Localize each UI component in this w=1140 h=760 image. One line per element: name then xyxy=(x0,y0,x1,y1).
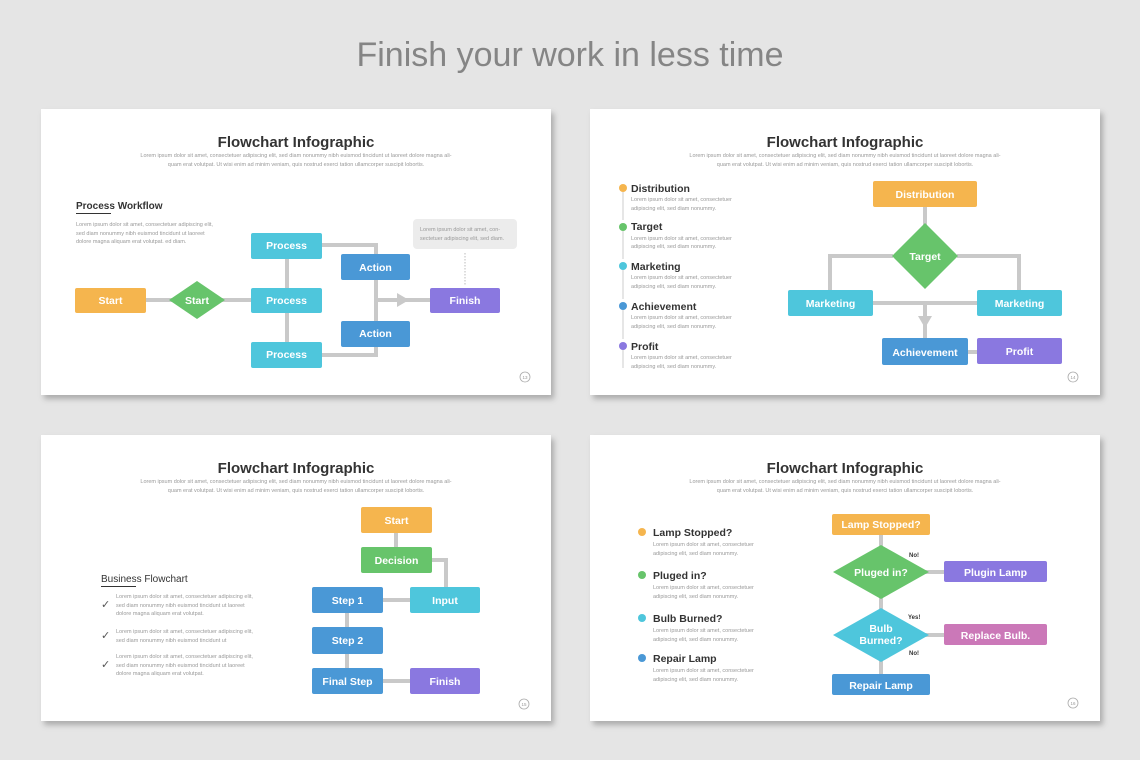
panel: lamp flowchart: 16 xyxy=(1070,701,1076,706)
list: Repair Lamp xyxy=(653,653,717,665)
text block: business flowchart: Business Flowchart xyxy=(101,574,188,585)
list: Profit xyxy=(631,341,659,353)
list: Lamp Stopped? xyxy=(653,527,732,539)
text block: business flowchart: Lorem ipsum dolor sit amet, consectetuer adipiscing elit, xyxy=(116,629,253,635)
list: Lorem ipsum dolor sit amet, consectetuer xyxy=(631,315,732,321)
list: Pluged in? xyxy=(653,570,707,582)
panel: lamp flowchart: No! xyxy=(909,651,919,657)
text block: business flowchart: ✓ xyxy=(101,659,110,671)
text block: subtitle: quam erat volutpat. Ut wisi enim ad minim veniam, quis nostrud exerci tation ullamcorper suscipit lobortis. xyxy=(168,488,425,494)
panel: lamp flowchart: Bulb xyxy=(869,623,893,635)
list: Distribution xyxy=(631,183,690,195)
panel: distribution flow: Marketing xyxy=(806,298,855,310)
text block: subtitle xyxy=(140,153,452,168)
list: adipiscing elit, sed diam nonummy. xyxy=(631,244,717,250)
callout xyxy=(413,219,517,249)
text block: subtitle: Lorem ipsum dolor sit amet, consectetuer adipiscing elit, sed diam nonummy nibh euismod tincidunt ut laoreet dolore magna ali- xyxy=(689,479,1001,485)
text block: process workflow: sed diam nonummy nibh euismod tincidunt ut laoreet xyxy=(76,231,205,237)
panel: distribution flow: Achievement xyxy=(892,347,958,359)
text block: subtitle xyxy=(689,479,1001,494)
panel: business flowchart: Start xyxy=(385,515,409,527)
panel: business flowchart xyxy=(41,435,551,721)
panel: distribution flow: Distribution xyxy=(896,189,954,201)
list: adipiscing elit, sed diam nonummy. xyxy=(653,594,739,600)
list: adipiscing elit, sed diam nonummy. xyxy=(653,677,739,683)
heading: Flowchart Infographic xyxy=(218,134,374,151)
panel: process workflow xyxy=(41,109,551,395)
list: Marketing xyxy=(631,261,681,273)
list xyxy=(619,183,732,370)
panel: process workflow: Process xyxy=(266,349,307,361)
panel: process workflow: Process xyxy=(266,295,307,307)
list: Lorem ipsum dolor sit amet, consectetuer xyxy=(631,197,732,203)
panel: lamp flowchart: Pluged in? xyxy=(854,567,908,579)
heading: Flowchart Infographic xyxy=(767,134,923,151)
panel: process workflow: Start xyxy=(99,295,123,307)
text block: business flowchart: dolore magna aliquam erat volutpat. xyxy=(116,671,204,677)
text block: subtitle: quam erat volutpat. Ut wisi enim ad minim veniam, quis nostrud exerci tation ullamcorper suscipit lobortis. xyxy=(717,162,974,168)
panel: business flowchart: 15 xyxy=(521,702,527,707)
text block: business flowchart: ✓ xyxy=(101,599,110,611)
list: Lorem ipsum dolor sit amet, consectetuer xyxy=(653,542,754,548)
text block: subtitle xyxy=(689,153,1001,168)
panel: distribution flow: Marketing xyxy=(995,298,1044,310)
callout: sectetuer adipiscing elit, sed diam. xyxy=(420,236,505,242)
list: Achievement xyxy=(631,301,697,313)
panel: process workflow: 13 xyxy=(522,375,528,380)
panel: process workflow: Finish xyxy=(450,295,480,307)
panel: lamp flowchart: No! xyxy=(909,553,919,559)
panel: lamp flowchart: Plugin Lamp xyxy=(964,567,1027,579)
panel: distribution flow: Profit xyxy=(1006,346,1034,358)
panel: process workflow: Action xyxy=(359,328,392,340)
text block: subtitle xyxy=(140,479,452,494)
panel: distribution flow: 14 xyxy=(1070,375,1076,380)
text block: subtitle: quam erat volutpat. Ut wisi enim ad minim veniam, quis nostrud exerci tation ullamcorper suscipit lobortis. xyxy=(717,488,974,494)
panel: lamp flowchart xyxy=(590,435,1100,721)
text block: business flowchart: Lorem ipsum dolor sit amet, consectetuer adipiscing elit, xyxy=(116,654,253,660)
text block: process workflow: dolore magna aliquam erat volutpat. ed diam. xyxy=(76,239,187,245)
panel: distribution flow xyxy=(590,109,1100,395)
list: Target xyxy=(631,221,663,233)
panel: business flowchart: Final Step xyxy=(322,676,373,688)
panel: lamp flowchart: Replace Bulb. xyxy=(961,630,1030,642)
list: adipiscing elit, sed diam nonummy. xyxy=(653,637,739,643)
text block: business flowchart: sed diam nonummy nibh euismod tincidunt ut xyxy=(116,638,227,644)
text block: subtitle: Lorem ipsum dolor sit amet, consectetuer adipiscing elit, sed diam nonummy nibh euismod tincidunt ut laoreet dolore magna ali- xyxy=(140,479,452,485)
panel: process workflow: Action xyxy=(359,262,392,274)
panel: business flowchart: Finish xyxy=(430,676,460,688)
panel: lamp flowchart: Lamp Stopped? xyxy=(841,519,921,531)
text block: subtitle: quam erat volutpat. Ut wisi enim ad minim veniam, quis nostrud exerci tation ullamcorper suscipit lobortis. xyxy=(168,162,425,168)
text block: business flowchart: ✓ xyxy=(101,630,110,642)
list: Lorem ipsum dolor sit amet, consectetuer xyxy=(631,355,732,361)
text block: business flowchart xyxy=(101,574,253,677)
text block: business flowchart: sed diam nonummy nibh euismod tincidunt ut laoreet xyxy=(116,603,245,609)
panel: business flowchart: Step 1 xyxy=(332,595,363,607)
callout: Lorem ipsum dolor sit amet, con- xyxy=(420,227,500,233)
heading: Flowchart Infographic xyxy=(218,460,374,477)
arrow xyxy=(397,293,409,307)
text block: subtitle: Lorem ipsum dolor sit amet, consectetuer adipiscing elit, sed diam nonummy nibh euismod tincidunt ut laoreet dolore magna ali- xyxy=(689,153,1001,159)
list: adipiscing elit, sed diam nonummy. xyxy=(631,364,717,370)
panel: business flowchart: Decision xyxy=(375,555,418,567)
text block: process workflow: Process Workflow xyxy=(76,201,163,212)
list: Lorem ipsum dolor sit amet, consectetuer xyxy=(631,275,732,281)
list: adipiscing elit, sed diam nonummy. xyxy=(631,206,717,212)
text block: business flowchart: Lorem ipsum dolor sit amet, consectetuer adipiscing elit, xyxy=(116,594,253,600)
text block: process workflow xyxy=(76,201,213,245)
title: Finish your work in less time xyxy=(356,36,784,74)
list xyxy=(638,527,754,683)
panel: business flowchart: Step 2 xyxy=(332,635,363,647)
list: Bulb Burned? xyxy=(653,613,722,625)
panel: process workflow: Start xyxy=(185,295,209,307)
panel: lamp flowchart: Repair Lamp xyxy=(849,680,913,692)
panel: lamp flowchart: Yes! xyxy=(908,615,920,621)
text block: business flowchart: sed diam nonummy nibh euismod tincidunt ut laoreet xyxy=(116,663,245,669)
list: Lorem ipsum dolor sit amet, consectetuer xyxy=(653,585,754,591)
text block: process workflow: Lorem ipsum dolor sit amet, consectetuer adipiscing elit, xyxy=(76,222,213,228)
heading: Flowchart Infographic xyxy=(767,460,923,477)
panel: process workflow: Process xyxy=(266,240,307,252)
panel: lamp flowchart: Burned? xyxy=(859,635,903,647)
panel: distribution flow: Target xyxy=(909,251,941,263)
text block: subtitle: Lorem ipsum dolor sit amet, consectetuer adipiscing elit, sed diam nonummy nibh euismod tincidunt ut laoreet dolore magna ali- xyxy=(140,153,452,159)
list: Lorem ipsum dolor sit amet, consectetuer xyxy=(653,628,754,634)
text block: business flowchart: dolore magna aliquam erat volutpat. xyxy=(116,611,204,617)
list: adipiscing elit, sed diam nonummy. xyxy=(653,551,739,557)
list: Lorem ipsum dolor sit amet, consectetuer xyxy=(653,668,754,674)
list: adipiscing elit, sed diam nonummy. xyxy=(631,284,717,290)
list: adipiscing elit, sed diam nonummy. xyxy=(631,324,717,330)
panel: business flowchart: Input xyxy=(432,595,458,607)
list: Lorem ipsum dolor sit amet, consectetuer xyxy=(631,236,732,242)
